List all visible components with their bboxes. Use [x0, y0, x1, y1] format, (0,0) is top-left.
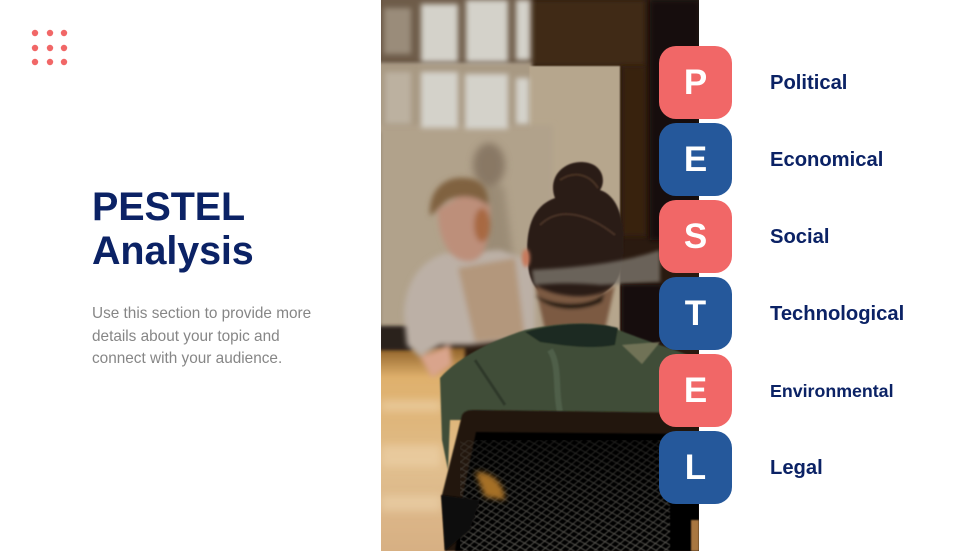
man: head — [430, 178, 490, 261]
label: Social: Social — [770, 226, 829, 248]
title — [92, 185, 254, 273]
woman: green jacket — [440, 323, 699, 470]
tile: P: P — [684, 63, 707, 102]
office chair — [441, 410, 699, 551]
photo: two people in a meeting — [381, 0, 699, 551]
tile: T: T — [685, 294, 706, 333]
man: shirt and arm — [404, 250, 535, 378]
woman: scarf band and neck — [522, 249, 660, 330]
tile: E: E — [684, 371, 707, 410]
beige wall — [378, 0, 532, 63]
label: Technological: Technological — [770, 303, 904, 325]
tile: L: L — [685, 448, 706, 487]
label: Legal: Legal — [770, 457, 823, 479]
tile: E: E — [684, 140, 707, 179]
title: PESTEL — [92, 185, 245, 229]
tile: P — [659, 46, 732, 119]
title: Analysis — [92, 229, 254, 273]
tile: S — [659, 200, 732, 273]
tile: L — [659, 431, 732, 504]
floor — [375, 348, 465, 551]
tile: S: S — [684, 217, 707, 256]
body text — [92, 305, 311, 367]
tile: E — [659, 123, 732, 196]
icon: dot grid — [32, 30, 68, 66]
tile: T — [659, 277, 732, 350]
wall shadow — [470, 143, 514, 261]
tile: E — [659, 354, 732, 427]
label: Political: Political — [770, 72, 847, 94]
window bars — [384, 0, 530, 129]
dark background — [381, 0, 699, 551]
woman: hair — [527, 162, 624, 303]
label: Environmental: Environmental — [770, 381, 894, 401]
body text: connect with your audience. — [92, 350, 282, 367]
body text: Use this section to provide more — [92, 305, 311, 322]
dark right side panel — [622, 285, 662, 345]
body text: details about your topic and — [92, 328, 280, 344]
label: Economical: Economical — [770, 149, 883, 171]
